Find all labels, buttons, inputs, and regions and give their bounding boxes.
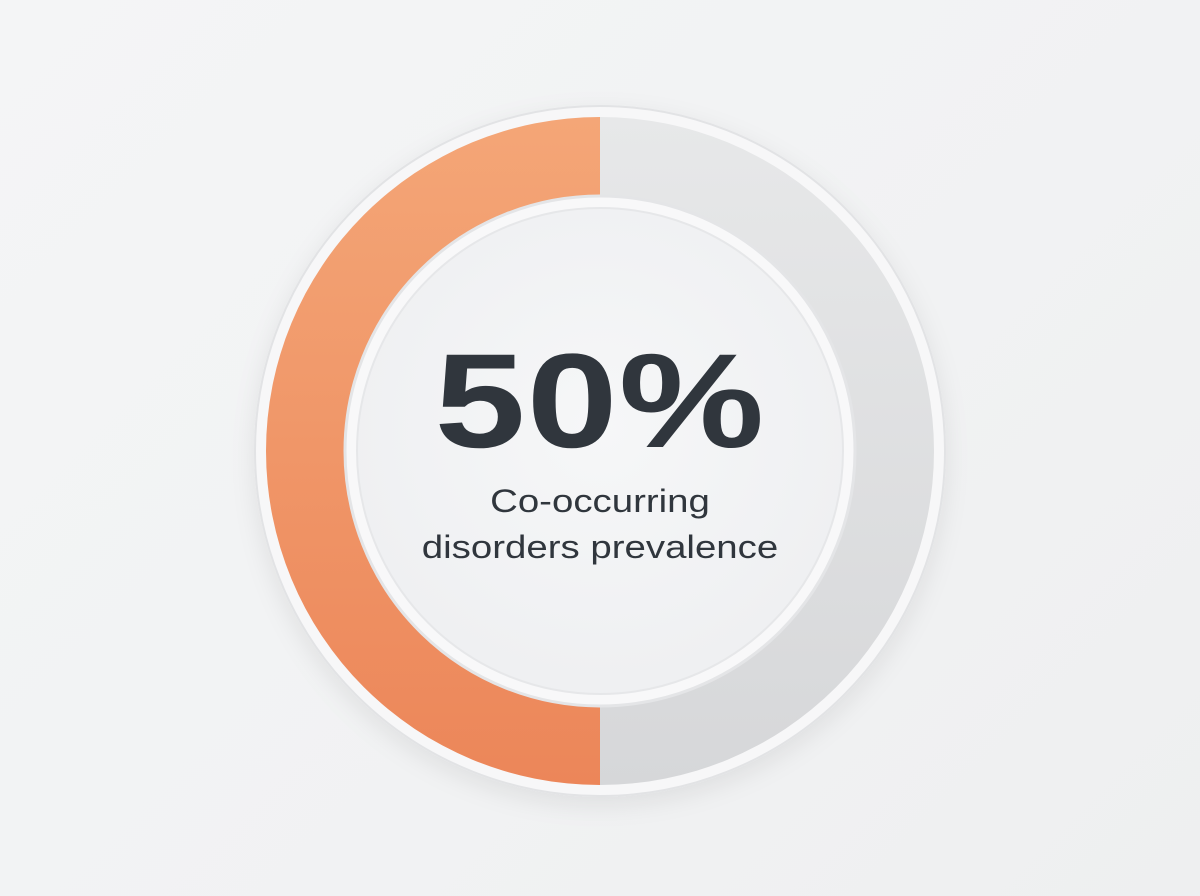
orange segment 50% — [266, 117, 600, 785]
caption — [422, 483, 778, 565]
center label — [422, 327, 778, 565]
inner disc — [345, 196, 855, 706]
outer ring base — [255, 106, 945, 796]
caption: disorders prevalence — [422, 529, 778, 565]
big percentage: 50% — [435, 327, 765, 476]
gray segment — [600, 117, 934, 785]
caption: Co-occurring — [490, 483, 710, 519]
